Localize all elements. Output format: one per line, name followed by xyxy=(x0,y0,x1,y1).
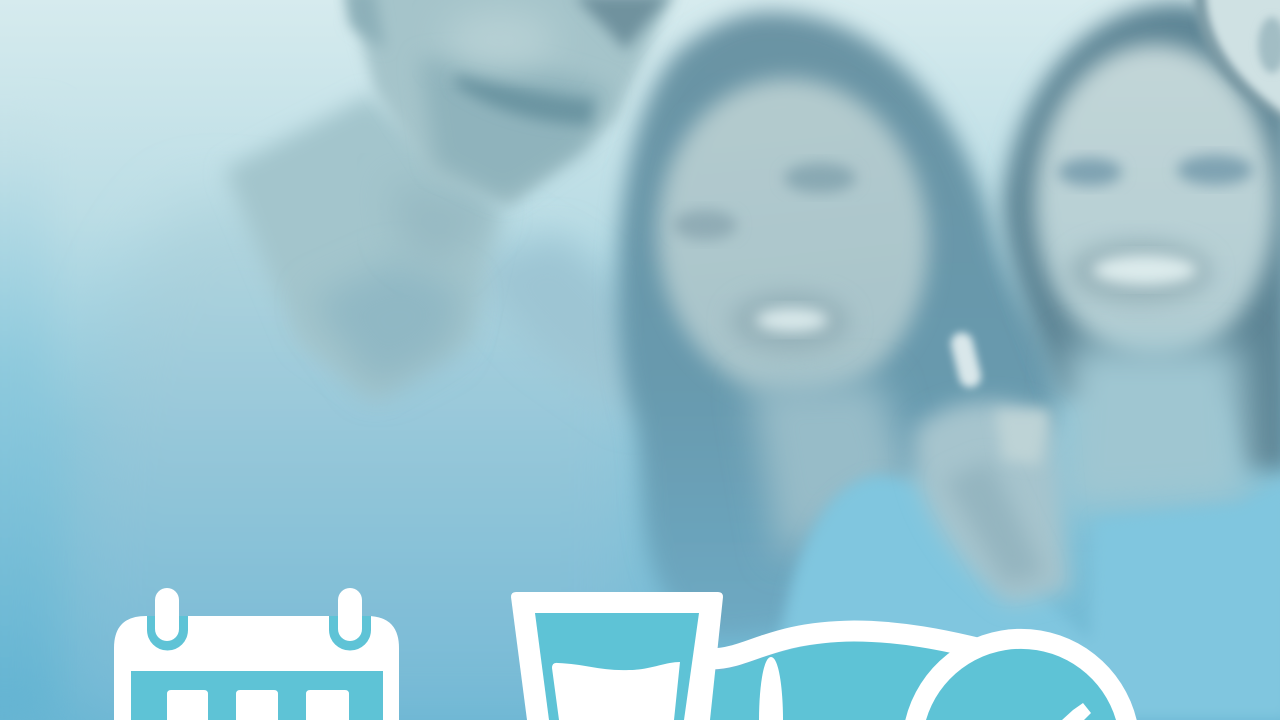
icon: calendar xyxy=(114,588,399,720)
calendar right ring xyxy=(329,588,371,650)
check badge: ring clipped at the frame edge xyxy=(905,629,1137,720)
icon: water bottle with check mark xyxy=(708,629,1137,720)
man: face and beard xyxy=(345,0,680,205)
glass interior xyxy=(535,613,699,720)
bottle fill xyxy=(708,641,985,720)
calendar body xyxy=(114,616,399,720)
left edge shading xyxy=(0,196,41,692)
woman right: hair xyxy=(1003,3,1280,470)
woman centre: hair xyxy=(618,12,1060,640)
icon: glass of water xyxy=(511,592,723,720)
check badge interior xyxy=(926,649,1116,720)
hand holding toothbrush xyxy=(914,330,1070,605)
woman right: face and neck xyxy=(1035,44,1275,510)
woman right: light blue top xyxy=(775,475,1280,720)
child face at top right xyxy=(1194,0,1280,124)
water level xyxy=(552,662,680,720)
calendar date cells xyxy=(167,690,349,720)
calendar left ring xyxy=(147,588,188,650)
calendar inner panel xyxy=(131,671,383,720)
man: neck and chest xyxy=(225,95,500,400)
woman centre: face xyxy=(642,65,944,560)
man: shirt and shoulders xyxy=(88,232,630,714)
glass body xyxy=(511,592,723,720)
bottle highlight xyxy=(759,657,783,720)
check mark xyxy=(1062,703,1091,720)
bottle outline xyxy=(712,631,985,659)
